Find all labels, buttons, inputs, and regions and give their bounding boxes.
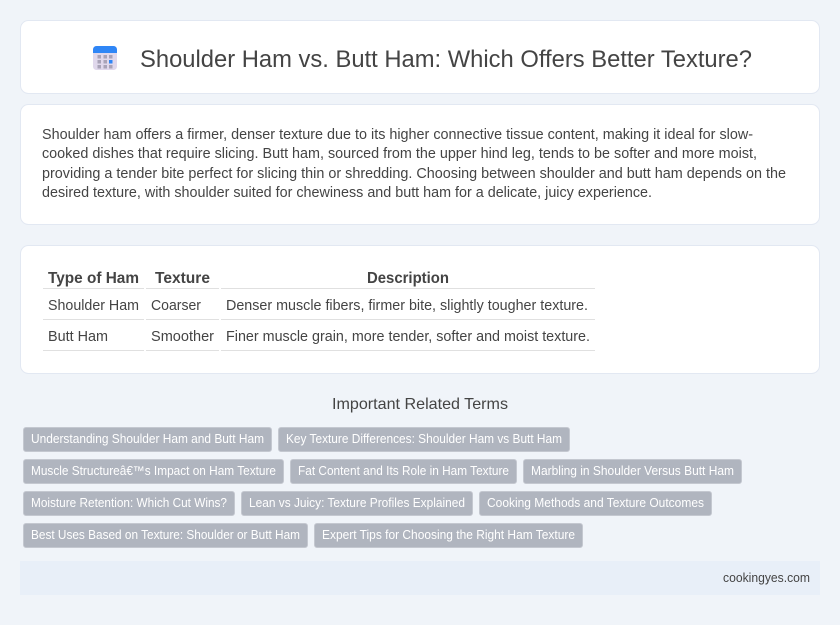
table header: Texture [155, 270, 210, 287]
text block: intro: Shoulder ham offers a firmer, denser texture due to its higher connective tissue content, making it ideal for slow- [42, 127, 753, 143]
text block: intro [42, 127, 786, 201]
chip: Fat Content and Its Role in Ham Texture [298, 464, 509, 478]
heading: related terms: Important Related Terms [332, 396, 508, 413]
chip: Lean vs Juicy: Texture Profiles Explained [249, 496, 465, 510]
footer: cookingyes.com [723, 571, 810, 585]
chip [524, 460, 742, 484]
table row: shoulder ham: Coarser [151, 298, 201, 314]
chip [314, 524, 582, 548]
table header: Description [367, 270, 449, 287]
chip [24, 492, 234, 516]
footer [20, 561, 820, 595]
table row: butt ham: Smoother [151, 329, 214, 345]
title: Shoulder Ham vs. Butt Ham: Which Offers Better Texture? [140, 46, 752, 73]
chip [290, 460, 516, 484]
table row: butt ham: Finer muscle grain, more tender, softer and moist texture. [226, 329, 590, 345]
chip: Muscle Structureâ€™s Impact on Ham Texture [31, 464, 276, 478]
chip: Understanding Shoulder Ham and Butt Ham [31, 432, 264, 446]
chip [24, 428, 272, 452]
chip [24, 524, 308, 548]
icon: calendar [93, 46, 117, 70]
chip [480, 492, 712, 516]
panel: related term chips [24, 428, 742, 548]
text block: intro: desired texture, with shoulder suited for chewiness and butt ham for a delicate, juicy experience. [42, 185, 652, 201]
panel: header [20, 20, 820, 94]
panel: intro paragraph [20, 104, 820, 224]
panel: comparison table [20, 246, 820, 374]
table row: butt ham [48, 329, 590, 345]
table row: shoulder ham: Shoulder Ham [48, 298, 139, 314]
table row: butt ham: Butt Ham [48, 329, 108, 345]
chip [242, 492, 472, 516]
table row: shoulder ham [48, 298, 588, 314]
chip: Marbling in Shoulder Versus Butt Ham [531, 464, 734, 478]
chip: Key Texture Differences: Shoulder Ham vs Butt Ham [286, 432, 562, 446]
table header [48, 270, 449, 287]
text block: intro: providing a tender bite perfect for slicing thin or shredding. Choosing between shoulder and butt ham depends on the [42, 166, 786, 182]
text block: intro: cooked dishes that require slicing. Butt ham, sourced from the upper hind leg, tends to be softer and more moist, [42, 146, 757, 162]
chip: Moisture Retention: Which Cut Wins? [31, 496, 227, 510]
chip: Expert Tips for Choosing the Right Ham Texture [322, 528, 575, 542]
chip: Cooking Methods and Texture Outcomes [487, 496, 704, 510]
chip [278, 428, 570, 452]
table row: shoulder ham: Denser muscle fibers, firmer bite, slightly tougher texture. [226, 298, 588, 314]
chip [24, 460, 284, 484]
table header: Type of Ham [48, 270, 139, 287]
chip: Best Uses Based on Texture: Shoulder or Butt Ham [31, 528, 300, 542]
